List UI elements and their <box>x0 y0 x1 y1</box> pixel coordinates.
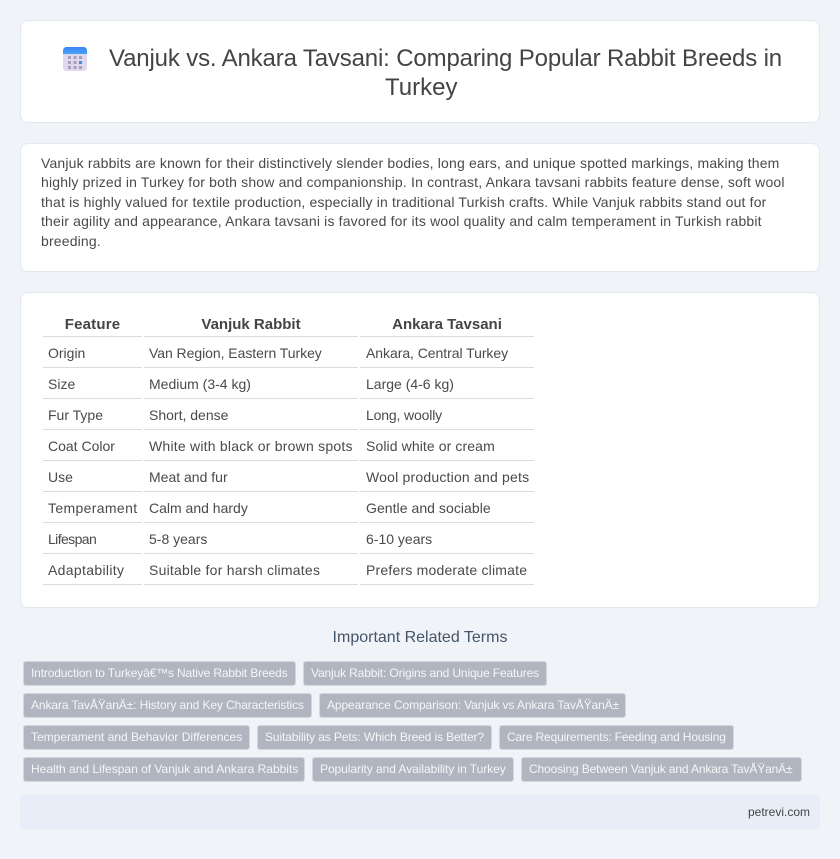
tag: Introduction to Turkeyâ€™s Native Rabbit Breeds <box>31 666 287 680</box>
row: adaptability: Adaptability <box>48 562 124 578</box>
row: origin: Van Region, Eastern Turkey <box>149 345 322 361</box>
row: size: Size <box>48 376 75 392</box>
title: Turkey <box>385 74 457 101</box>
icon: calendar <box>63 47 87 71</box>
row: lifespan: 6-10 years <box>366 531 432 547</box>
tag: Suitability as Pets: Which Breed is Better? <box>265 730 484 744</box>
table header <box>65 316 502 333</box>
tag <box>23 725 250 750</box>
panel: introduction <box>20 143 820 272</box>
text block: introduction: their agility and appearance, Ankara tavsani is favored for its wool quality and calm temperament in Turkish rabbit <box>41 213 762 229</box>
text block: introduction: Vanjuk rabbits are known for their distinctively slender bodies, long ears, and unique spotted markings, making them <box>41 155 780 171</box>
panel: header <box>20 20 820 123</box>
tag: Vanjuk Rabbit: Origins and Unique Features <box>311 666 539 680</box>
comparison table <box>43 316 534 585</box>
row: coat color: White with black or brown spots <box>149 438 353 454</box>
tag: Temperament and Behavior Differences <box>31 730 242 744</box>
row: use: Use <box>48 469 73 485</box>
row: temperament: Temperament <box>48 500 137 516</box>
row: fur type <box>48 407 442 423</box>
row: adaptability: Suitable for harsh climates <box>149 562 320 578</box>
tag <box>23 661 296 686</box>
tag: Popularity and Availability in Turkey <box>320 762 506 776</box>
title <box>109 45 782 101</box>
tag <box>257 725 492 750</box>
related terms tags <box>23 661 802 782</box>
text block: introduction: that is highly valued for textile production, especially in traditional Turkish crafts. While Vanjuk rabbits stand out for <box>41 194 766 210</box>
footer <box>20 795 820 829</box>
row: size: Large (4-6 kg) <box>366 376 454 392</box>
row: lifespan: Lifespan <box>48 531 96 547</box>
row: coat color <box>48 438 495 454</box>
tag <box>319 693 626 718</box>
row: size <box>48 376 454 392</box>
tag <box>23 757 305 782</box>
tag: Choosing Between Vanjuk and Ankara TavÅŸanÄ± <box>529 762 792 776</box>
row: size: Medium (3-4 kg) <box>149 376 251 392</box>
tag <box>312 757 514 782</box>
row: coat color: Solid white or cream <box>366 438 495 454</box>
tag: Care Requirements: Feeding and Housing <box>507 730 726 744</box>
tag <box>303 661 547 686</box>
row: temperament: Gentle and sociable <box>366 500 491 516</box>
row: origin: Ankara, Central Turkey <box>366 345 508 361</box>
table header: Vanjuk Rabbit <box>201 316 301 333</box>
row: lifespan: 5-8 years <box>149 531 207 547</box>
table header: Feature <box>65 316 120 333</box>
row: fur type: Short, dense <box>149 407 228 423</box>
row: use <box>48 469 529 485</box>
row: use: Wool production and pets <box>366 469 529 485</box>
heading: important related terms: Important Related Terms <box>333 629 507 646</box>
text block: introduction: breeding. <box>41 233 101 249</box>
title: Vanjuk vs. Ankara Tavsani: Comparing Popular Rabbit Breeds in <box>109 45 782 72</box>
row: origin <box>48 345 508 361</box>
tag <box>521 757 802 782</box>
row: adaptability: Prefers moderate climate <box>366 562 527 578</box>
row: use: Meat and fur <box>149 469 228 485</box>
text block: introduction: highly prized in Turkey for both show and companionship. In contrast, Ankara tavsani rabbits feature dense, soft wool <box>41 174 785 190</box>
row: fur type: Fur Type <box>48 407 103 423</box>
panel: comparison table <box>20 292 820 608</box>
tag <box>23 693 312 718</box>
text block: introduction <box>41 155 785 249</box>
tag: Appearance Comparison: Vanjuk vs Ankara TavÅŸanÄ± <box>327 698 619 712</box>
row: temperament: Calm and hardy <box>149 500 248 516</box>
tag: Ankara TavÅŸanÄ±: History and Key Characteristics <box>31 698 304 712</box>
row: adaptability <box>48 562 527 578</box>
row: origin: Origin <box>48 345 85 361</box>
row: lifespan <box>48 531 432 547</box>
row: temperament <box>48 500 491 516</box>
footer credit: petrevi.com <box>748 805 810 819</box>
row: fur type: Long, woolly <box>366 407 442 423</box>
row: coat color: Coat Color <box>48 438 115 454</box>
tag: Health and Lifespan of Vanjuk and Ankara Rabbits <box>31 762 298 776</box>
tag <box>499 725 734 750</box>
table header: Ankara Tavsani <box>392 316 502 333</box>
